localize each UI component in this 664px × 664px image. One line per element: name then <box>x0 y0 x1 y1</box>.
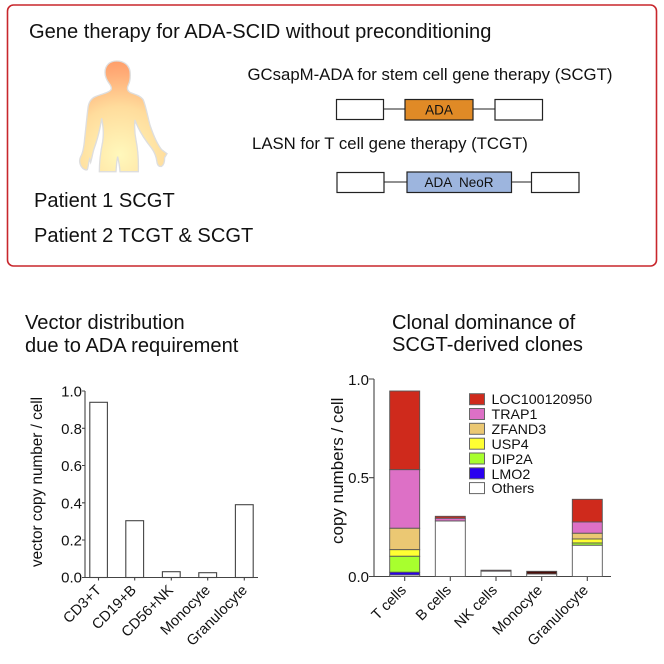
x category labels: Granulocyte <box>184 583 251 649</box>
y tick labels <box>61 384 82 586</box>
diagram: LASN vector <box>337 172 579 192</box>
stack: NK cells <box>481 570 511 576</box>
y tick labels: 0.4 <box>61 495 82 512</box>
diagram: GCsapM-ADA vector: ADA <box>425 102 453 118</box>
x category labels: Monocyte <box>490 583 546 639</box>
y tick labels: 0.0 <box>348 569 369 586</box>
legend: LMO2 <box>492 467 530 483</box>
stack: Granulocyte <box>572 499 602 576</box>
stack: T cells <box>390 391 420 576</box>
x category labels: CD56+NK <box>119 582 177 641</box>
heading: vector distribution: Vector distribution <box>25 312 185 334</box>
bars <box>90 402 253 578</box>
y tick labels: 1.0 <box>61 384 82 400</box>
x category labels: CD19+B <box>89 583 140 633</box>
heading: vector distribution: due to ADA requirement <box>25 335 239 357</box>
diagram: LASN vector: ADA NeoR <box>424 175 494 190</box>
y tick labels: 0.2 <box>61 532 82 550</box>
stacked bar chart: copy numbers per cell <box>328 372 611 649</box>
x category labels: Monocyte <box>158 583 214 639</box>
legend <box>470 392 592 497</box>
x category labels: Granulocyte <box>525 583 592 649</box>
legend: Others <box>492 481 534 497</box>
y tick labels: 0.0 <box>61 570 82 586</box>
legend: USP4 <box>492 437 529 453</box>
title: Gene therapy for ADA-SCID without preconditioning <box>29 21 491 43</box>
heading: clonal dominance: Clonal dominance of <box>392 312 576 334</box>
heading: clonal dominance: SCGT-derived clones <box>392 334 583 356</box>
x category labels: T cells <box>369 583 410 623</box>
legend: LOC100120950 <box>492 392 592 408</box>
y tick labels: 0.6 <box>61 458 82 475</box>
bar chart: vector copy number per cell <box>29 384 258 649</box>
x category labels <box>369 583 592 649</box>
legend: TRAP1 <box>492 407 538 423</box>
y tick labels: 1.0 <box>348 372 369 389</box>
text: patient 2: Patient 2 TCGT & SCGT <box>34 225 253 247</box>
panel: gene therapy overview <box>8 5 656 266</box>
stack: B cells <box>435 516 465 576</box>
y axis title: copy numbers / cell <box>328 398 347 544</box>
legend: DIP2A <box>492 452 533 468</box>
x category labels: B cells <box>413 583 455 624</box>
y tick labels: 0.5 <box>348 470 369 487</box>
text: LASN vector label: LASN for T cell gene therapy (TCGT) <box>252 134 528 153</box>
y tick labels: 0.8 <box>61 421 82 438</box>
y tick labels <box>348 372 369 586</box>
stack: Monocyte <box>527 571 557 576</box>
icon: human silhouette <box>80 61 167 172</box>
diagram: GCsapM-ADA vector <box>336 100 542 120</box>
x category labels: CD3+T <box>61 582 105 627</box>
y axis <box>82 391 258 580</box>
legend: ZFAND3 <box>492 422 546 438</box>
x category labels: NK cells <box>452 583 501 632</box>
y axis title: vector copy number / cell <box>29 397 46 567</box>
x category labels <box>61 582 251 649</box>
axes <box>369 379 611 581</box>
text: patient 1: Patient 1 SCGT <box>34 190 175 212</box>
text: GCsapM-ADA vector label: GCsapM-ADA for stem cell gene therapy (SCGT) <box>248 65 612 84</box>
